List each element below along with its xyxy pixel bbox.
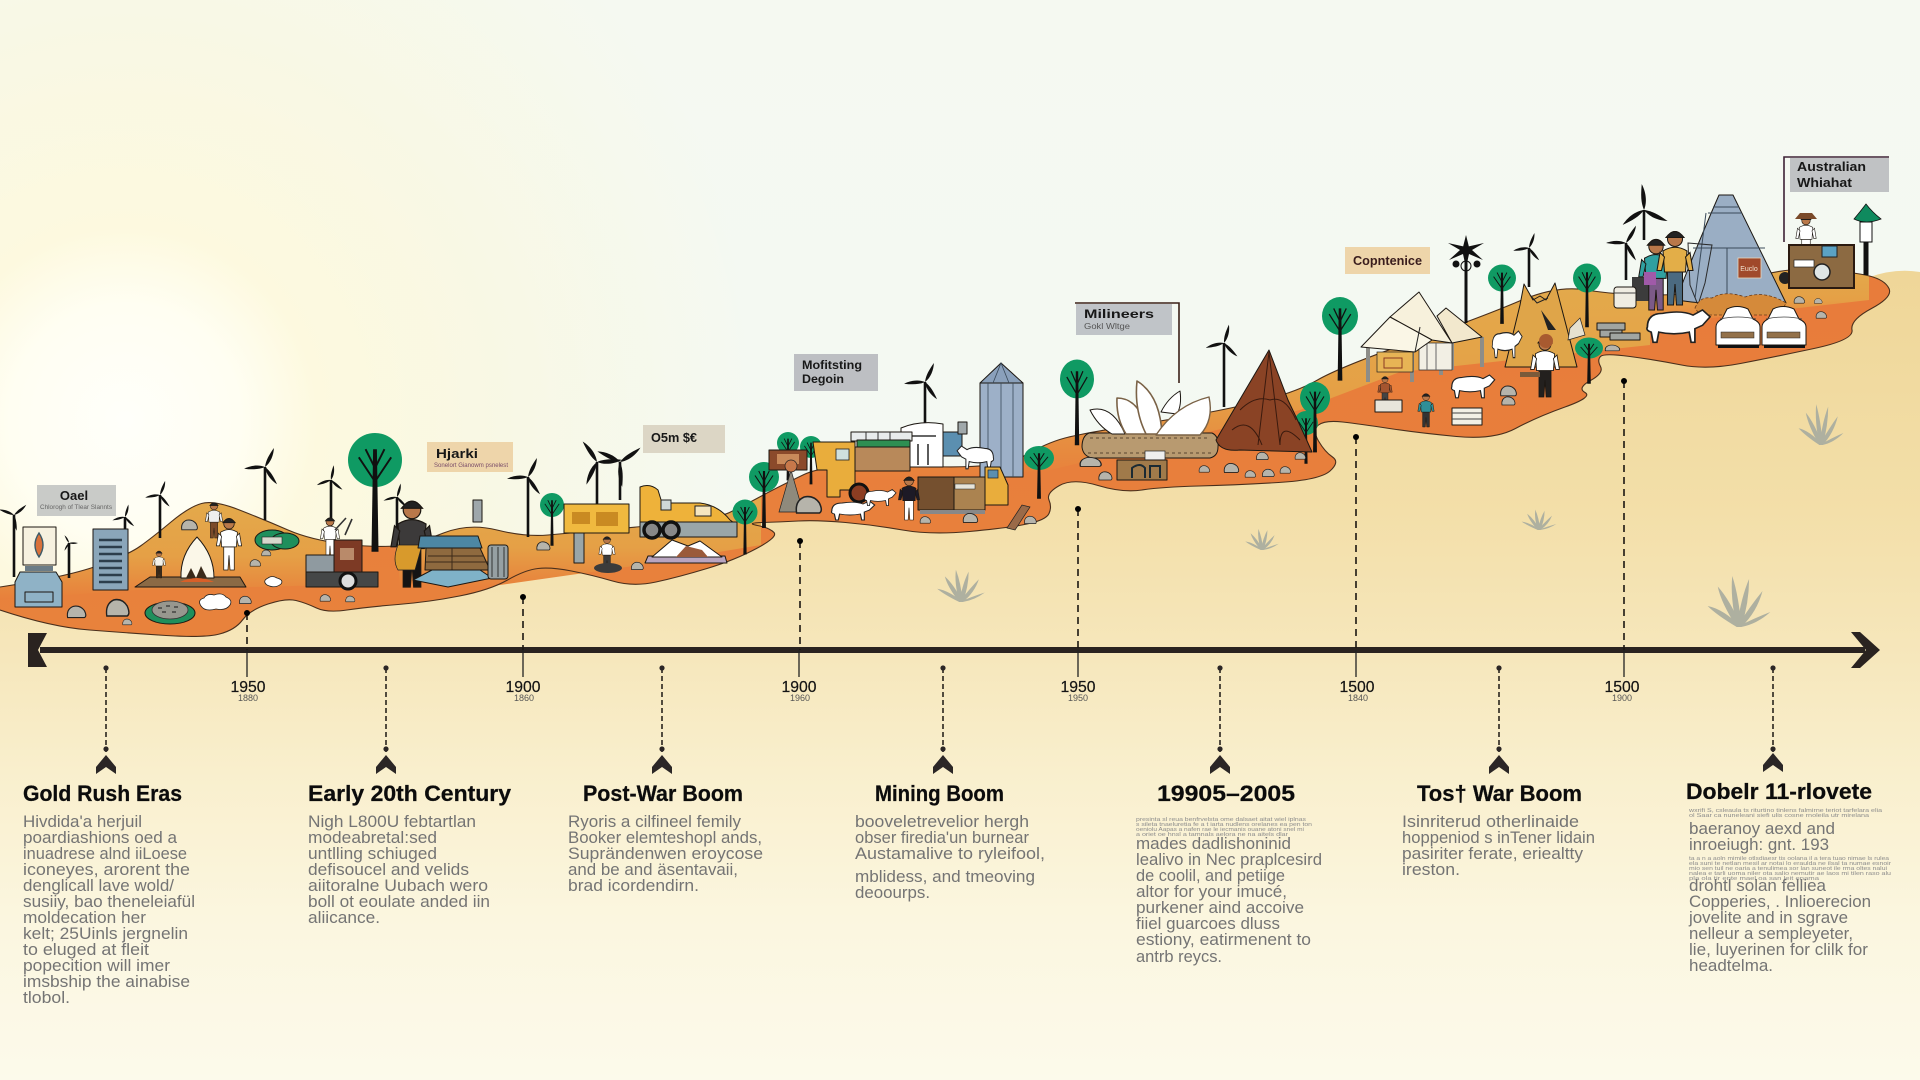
icon: desk with person (1779, 213, 1854, 318)
label: Copntenice (1345, 247, 1430, 274)
text column: 19905-2005: mades dadlishoninid (1136, 835, 1291, 853)
text column: Dobelr 11-rlovete (1686, 779, 1891, 975)
period pointers below axis (96, 665, 1783, 774)
icon: street lamp (1854, 204, 1881, 275)
icon: barrel and machinery (1614, 277, 1656, 308)
text column: Dobelr 11-rlovete: jovelite and in sgrave (1688, 909, 1848, 927)
label: Hjarki (427, 442, 513, 472)
text column: Tost War Boom: Tos† War Boom (1417, 781, 1582, 806)
middle chunk rocks (796, 497, 1036, 530)
icon: visiting couple (1639, 232, 1693, 310)
icon: yellow truck (640, 486, 737, 538)
text column: 19905-2005: presinta sl reua benfrvelsta ome dalsaet aitat wiel iplnas (1136, 817, 1307, 823)
label: Australian Whiahat with flag pole: Whiahat (1797, 175, 1853, 190)
text column: Early 20th Century (308, 781, 512, 927)
text column: Tost War Boom: hoppeniod s inTener lidain (1402, 829, 1595, 847)
text column: Early 20th Century: boll ot eoulate anded iin (308, 893, 490, 911)
connectors from landscape to axis (244, 378, 1627, 677)
text column: Post-War Boom: Booker elemteshopl ands, (568, 829, 762, 847)
label: Mofitsting Degoin: Degoin (802, 372, 844, 386)
label: O5m $€ (643, 425, 725, 453)
text column: Mining Boom: Austamalive to ryleifool, (855, 845, 1045, 863)
text column: Gold Rush Eras: to eluged at fleit (23, 941, 149, 959)
text column: Gold Rush Eras: kelt; 25Uinls jergnelin (23, 925, 188, 943)
text column: 19905-2005: purkener aind accoive (1136, 899, 1304, 917)
text column: Gold Rush Eras: inuadrese alnd iiLoese (23, 845, 187, 863)
text column: Dobelr 11-rlovete: baeranoy aexd and (1689, 820, 1835, 838)
timeline axis (28, 632, 1880, 668)
text column: Dobelr 11-rlovete: drohtl solan felliea (1689, 877, 1827, 895)
text column: Gold Rush Eras: moldecation her (23, 909, 147, 927)
year labels: 1500 (1340, 679, 1375, 696)
text column: 19905-2005: estiony, eatirmenent to (1136, 931, 1311, 949)
text column: Early 20th Century: aiitoralne Uubach wero (308, 877, 488, 895)
icon: dump truck with green load (813, 432, 912, 502)
text column: 19905-2005: de coolil, and petiige (1136, 867, 1285, 885)
panel: orange landscape band (0, 269, 1890, 636)
icon: large white goat (1647, 310, 1710, 342)
icon: stone slabs (1597, 323, 1640, 351)
icon: brown sign with woman (769, 450, 807, 512)
label: O5m $€: O5m $€ (651, 430, 697, 445)
year labels: 1900 (782, 679, 817, 696)
year labels: 1840 (1348, 693, 1368, 703)
text column: Gold Rush Eras (23, 781, 195, 1007)
text column: Post-War Boom (568, 781, 763, 895)
figures on gold hill (182, 503, 242, 570)
label: Millineers with flag pole: Milineers (1084, 307, 1154, 321)
label: Hjarki: Hjarki (436, 446, 478, 461)
year labels: 1900 (1612, 693, 1632, 703)
icon: silo (980, 363, 1023, 477)
icon: desert plants (937, 404, 1843, 627)
icon: white fleece bales (200, 576, 282, 610)
icon: seated worker (1520, 334, 1559, 397)
year labels: 1950 (1068, 693, 1088, 703)
icon: house tent (1361, 292, 1482, 382)
icon: opera house (1082, 381, 1218, 460)
text column: Dobelr 11-rlovete: ta a n a aoln mimile otlsdiaesr tis oolana il a tera tuao nimae ls rulea (1689, 856, 1889, 862)
icon: brown box and rocks near opera house (1080, 452, 1306, 480)
label: Australian Whiahat with flag pole (1784, 157, 1889, 242)
wind turbines (0, 182, 1669, 578)
year labels (230, 679, 1640, 703)
icon: goats and sheep (831, 446, 994, 520)
icon: pyramid: Euclo (1740, 266, 1758, 273)
icon: barrel and tower (473, 500, 508, 579)
text column: 19905-2005: fiiel guarcoes dluss (1136, 915, 1280, 933)
text column: Tost War Boom: Isinriterud otherlinaide (1402, 813, 1579, 831)
text column: Early 20th Century: Nigh L800U febtartlan (308, 813, 476, 831)
text column: 19905-2005: altor for your imucé, (1136, 883, 1287, 901)
sand ground (0, 271, 1920, 1080)
icon: yellow mountain range (1505, 283, 1585, 367)
text column: Mining Boom (855, 781, 1045, 902)
text column: Post-War Boom: brad icordendirn. (568, 877, 699, 895)
icon: stone pile in shrubs (145, 601, 195, 624)
icon: pyramid (1676, 195, 1786, 305)
icon: scientist with generator (306, 518, 378, 589)
label: Mofitsting Degoin: Mofitsting (802, 358, 862, 372)
text column: Gold Rush Eras: susiiy, bao theneleiafül (23, 893, 195, 911)
text column: Gold Rush Eras: imsbship the ainabise (23, 973, 190, 991)
icon: blue building (93, 529, 128, 590)
text column: Early 20th Century: untlling schiuged (308, 845, 437, 863)
year labels: 1860 (514, 693, 534, 703)
icon: yellow truck and crate (918, 467, 1008, 514)
label: Millineers with flag pole (1075, 303, 1179, 383)
year labels: 1900 (506, 679, 541, 696)
text column: Dobelr 11-rlovete: wxrifi S, csleaula ts riturtino tinlens falmirne teriot tarfelara elia (1689, 808, 1882, 814)
text column: Dobelr 11-rlovete: mio sen tuil ne oaria a tenulimea sor lan suneot ile rma oltes nalui (1689, 866, 1887, 872)
year labels: 1500 (1604, 679, 1640, 696)
sun glow (0, 0, 1000, 1080)
label: Copntenice: Copntenice (1353, 253, 1422, 268)
label: Oael (37, 485, 116, 516)
year labels: 1960 (790, 693, 810, 703)
text column: 19905-2005 (1136, 781, 1322, 966)
text column: 19905-2005: lealivo in Nec praplcesird (1136, 851, 1322, 869)
text column: Mining Boom: obser firedia'un burnear (855, 829, 1029, 847)
text column: Gold Rush Eras: popecition will imer (23, 957, 171, 975)
text column: 19905-2005: a oriet oe hnsl a tamnals aelora ne na aitels dlar (1136, 832, 1288, 838)
label: Millineers with flag pole: Gokl Wltge (1084, 322, 1131, 331)
icon: white building and blue box (901, 422, 967, 467)
text column: Mining Boom: booveletrevelior hergh (855, 813, 1029, 831)
text column: Mining Boom: mblidess, and tmeoving (855, 868, 1035, 886)
icon: blue-roofed shed (413, 536, 492, 587)
text column: Dobelr 11-rlovete: Copperies, . Inlioerecion (1689, 893, 1871, 911)
year labels: 1950 (1060, 679, 1096, 696)
icon: yellow container unit (564, 504, 629, 563)
text column: Post-War Boom: and be and äsentavaii, (568, 861, 738, 879)
text column: Gold Rush Eras: poardiashions oed a (23, 829, 178, 847)
text column: Gold Rush Eras: Gold Rush Eras (23, 781, 182, 806)
text column: Post-War Boom: Ryoris a cilfineel femily (568, 813, 742, 831)
text column: Dobelr 11-rlovete: nelleur a sempleyeter, (1689, 925, 1853, 943)
text column: 19905-2005: oeniolu Aapas a nafen rae le iecmanis ouane atoni snel mi (1136, 827, 1304, 833)
label: Mofitsting Degoin (794, 354, 878, 391)
text column: Dobelr 11-rlovete: headtelma. (1689, 957, 1773, 975)
text column: Dobelr 11-rlovete: pla ola tir ente mael oa san leit enama (1689, 876, 1819, 882)
year labels: 1950 (230, 679, 266, 696)
text column: Dobelr 11-rlovete: lie, luyerinen for clilk for (1689, 941, 1869, 959)
icon: tepee and campfire (135, 537, 246, 587)
icon: goats and herders (1375, 331, 1522, 427)
icon: ore pile (1695, 294, 1786, 315)
icon: farmer figure (898, 477, 920, 520)
text column: Post-War Boom: Post-War Boom (583, 781, 743, 806)
text column: Early 20th Century: aliicance. (308, 909, 380, 927)
label: Oael: Oael (60, 488, 88, 503)
text column: Gold Rush Eras: iconeyes, arorent the (23, 861, 190, 879)
icon: gas sign and machine (15, 527, 62, 607)
icon: bush with crate (255, 530, 299, 550)
year labels: 1880 (238, 693, 258, 703)
icon: rock and ore pile (645, 540, 727, 563)
icon: seated figure (594, 537, 622, 573)
label: Hjarki: Sonelort Gianowm psnelest (434, 463, 508, 469)
trees (348, 264, 1603, 554)
text column: Gold Rush Eras: tlobol. (23, 989, 70, 1007)
text column: Tost War Boom: pasiriter ferate, eriealtty (1402, 845, 1584, 863)
label: Oael: Chlorogh of Tlear Slannts (40, 504, 113, 511)
text column: 19905-2005: 19905–2005 (1157, 781, 1295, 806)
text column: Tost War Boom (1402, 781, 1595, 879)
text column: Post-War Boom: Suprändenwen eroycose (568, 845, 763, 863)
icon: twin white cars (1716, 306, 1806, 348)
text column: Gold Rush Eras: Hivdida'a herjuil (23, 813, 142, 831)
text column: Dobelr 11-rlovete: inroeiugh: gnt. 193 (1689, 836, 1829, 854)
small rocks left (67, 542, 643, 625)
text column: Tost War Boom: ireston. (1402, 861, 1460, 879)
text column: Early 20th Century: modeabretal:sed (308, 829, 437, 847)
text column: Dobelr 11-rlovete: ol Saar ca nuneleani siefi ulis cosne rnoleila utr mirelana (1689, 813, 1869, 819)
label: Australian Whiahat with flag pole: Australian (1797, 159, 1866, 174)
text column: 19905-2005: s sileta tnaeluretia fe a t iarta nudlens orelanes ea pen ton (1136, 822, 1312, 828)
text column: Dobelr 11-rlovete: Dobelr 11-rlovete (1686, 779, 1872, 804)
text column: Early 20th Century: Early 20th Century (308, 781, 512, 806)
text column: Gold Rush Eras: denglicall lave wold/ (23, 877, 174, 895)
text column: Early 20th Century: defisoucel and velids (308, 861, 469, 879)
text column: Dobelr 11-rlovete: ela suni te netlan mesil ar notai lo eraulda ne ilsal ta numae esnoir (1689, 861, 1891, 867)
icon: worker figure (391, 501, 433, 587)
text column: Mining Boom: Mining Boom (875, 781, 1004, 806)
text column: Mining Boom: deoourps. (855, 884, 930, 902)
text column: 19905-2005: antrb reycs. (1136, 948, 1222, 966)
icon: brown rock mountain (1216, 350, 1312, 452)
icon: palm lamp (1448, 235, 1484, 323)
text column: Dobelr 11-rlovete: nalea e tarli uoma niler ota salio nemutir ae laos mi tilen raso alu (1689, 871, 1891, 877)
